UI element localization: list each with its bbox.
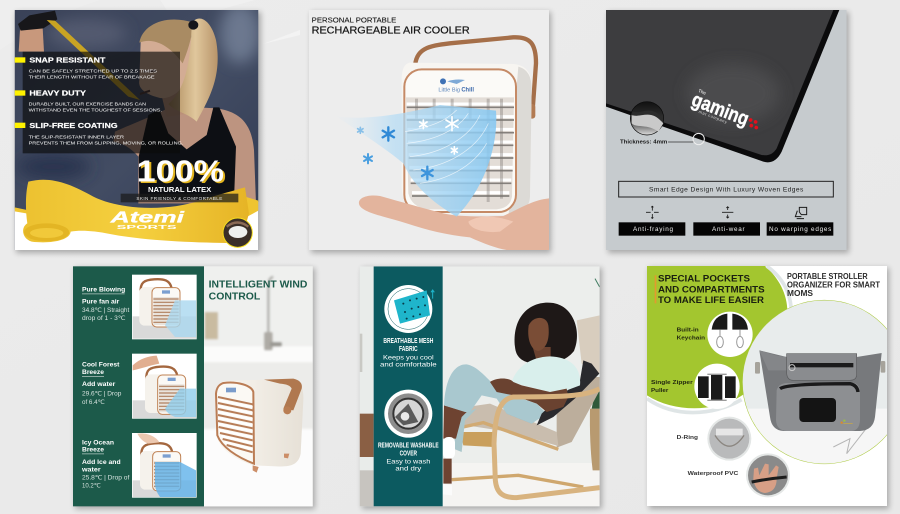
heading <box>209 280 307 303</box>
feature: removable washable cover: Easy to wash <box>386 459 431 466</box>
hand <box>359 196 549 250</box>
label: no warping edges: No warping edges <box>769 226 831 233</box>
panel: intelligent wind control <box>73 264 315 509</box>
yellow band <box>15 180 258 243</box>
heading: INTELLIGENT WIND <box>209 280 307 291</box>
headline: SPECIAL POCKETS <box>658 274 750 284</box>
title: MOMS <box>787 289 814 298</box>
mode 2: cool forest breeze <box>82 354 197 419</box>
headline: AND COMPARTMENTS <box>658 284 765 294</box>
logo on cooler: Chill <box>461 86 474 93</box>
icon: anti-wear <box>722 207 733 218</box>
feature: single zipper puller <box>651 364 740 409</box>
label: anti-wear <box>693 222 760 236</box>
feature list: SNAP RESISTANT <box>29 58 106 65</box>
black top <box>139 107 236 200</box>
feature: single zipper puller: Single Zipper <box>651 380 694 386</box>
headline: 100% natural latex: 100% <box>139 155 226 190</box>
feature: breathable mesh: and comfortable <box>380 361 437 368</box>
heading: RECHARGEABLE AIR COOLER <box>312 25 470 36</box>
feature: waterproof pvc: Waterproof PVC <box>688 471 738 477</box>
teal sidebar <box>374 266 443 506</box>
feature list <box>15 57 183 145</box>
feature list: CAN BE SAFELY STRETCHED UP TO 2.5 TIMES <box>29 69 157 74</box>
logo <box>110 210 185 229</box>
cooler body <box>402 63 532 215</box>
icons: snowflakes <box>358 117 458 179</box>
mode 3: icy ocean breeze: Icy Ocean <box>82 439 114 446</box>
banner: smart edge design <box>619 181 833 197</box>
feature list: HEAVY DUTY <box>29 91 86 98</box>
feature: built-in keychain: Built-in <box>677 327 699 333</box>
mode 3: icy ocean breeze <box>81 433 197 498</box>
feature list: SLIP-FREE COATING <box>29 123 118 130</box>
feature: removable washable cover: and dry <box>395 465 422 472</box>
mode 3: icy ocean breeze: Breeze <box>82 447 104 454</box>
feature: breathable mesh <box>380 285 437 368</box>
title: ORGANIZER FOR SMART <box>787 280 880 289</box>
panel: stroller organizer <box>647 266 900 506</box>
photo: athlete <box>18 11 256 203</box>
logo on cooler: Little Big <box>438 87 460 93</box>
mode 1: pure blowing: drop of 1 - 3℃ <box>82 315 125 322</box>
heading: PERSONAL PORTABLE <box>312 18 397 25</box>
text backdrop <box>23 52 180 153</box>
face <box>139 38 192 98</box>
logo: gaming <box>689 89 752 131</box>
feature list: WITHSTAND EVEN THE TOUGHEST OF SESSIONS. <box>29 107 162 112</box>
mode 2: cool forest breeze: Add water <box>82 381 116 388</box>
cold air stream <box>353 105 496 216</box>
panel: seat cushion <box>360 266 600 506</box>
product photo circle <box>740 300 900 465</box>
feature: breathable mesh: BREATHABLE MESH <box>383 338 433 345</box>
mode 2: cool forest breeze: Cool Forest <box>82 362 120 369</box>
cooler handle <box>415 37 536 110</box>
banner: smart edge design: Smart Edge Design With Luxury Woven Edges <box>649 186 804 193</box>
feature: built-in keychain: Keychain <box>677 336 706 342</box>
feature list: PREVENTS THEM FROM SLIPPING, MOVING, OR ROLLING. <box>29 140 183 145</box>
logo: SPORTS <box>117 225 177 231</box>
thickness callout <box>620 133 704 146</box>
green sidebar <box>73 266 204 506</box>
kitchen backdrop <box>202 264 315 509</box>
label: no warping edges <box>767 222 833 236</box>
heading: CONTROL <box>209 292 260 303</box>
feature: breathable mesh: Keeps you cool <box>383 355 434 362</box>
logo: The <box>697 88 707 96</box>
label: anti-wear: Anti-wear <box>712 226 745 233</box>
wall texture highlights <box>17 3 260 180</box>
mode 1: pure blowing: Pure fan air <box>82 299 120 306</box>
hair <box>139 20 193 63</box>
feature list: THE SLIP-RESISTANT INNER LAYER <box>29 135 125 140</box>
title: PORTABLE STROLLER <box>787 272 868 281</box>
green quarter circle <box>647 266 787 408</box>
feature: built-in keychain <box>677 312 753 357</box>
icon: latex badge <box>223 218 252 247</box>
icon: anti-fraying <box>646 206 659 219</box>
feature: removable washable cover <box>378 390 439 472</box>
logo: mat company <box>698 109 728 124</box>
mode 1: pure blowing <box>82 275 197 339</box>
title <box>787 272 880 298</box>
product: grey organizer bag <box>755 350 885 431</box>
product: cooler <box>215 379 303 473</box>
mode 3: icy ocean breeze: Add Ice and <box>82 459 121 466</box>
edge detail lens <box>630 102 664 135</box>
headline: TO MAKE LIFE EASIER <box>658 295 764 305</box>
feature list: THEIR LENGTH WITHOUT FEAR OF BREAKAGE <box>29 74 155 79</box>
feature: breathable mesh: FABRIC <box>399 346 418 353</box>
mode 2: cool forest breeze: of 6.4℃ <box>82 399 105 406</box>
mode 1: pure blowing: 34.8℃ | Straight <box>82 307 130 314</box>
mat <box>606 10 839 162</box>
headline: 100% natural latex: NATURAL LATEX <box>148 185 212 194</box>
panel: gaming mouse mat <box>606 10 847 250</box>
thickness callout: Thickness: 4mm <box>620 140 668 146</box>
feature: single zipper puller: Puller <box>651 388 669 394</box>
headline: 100% natural latex <box>120 160 238 202</box>
mode 3: icy ocean breeze: 10.2℃ <box>82 483 101 490</box>
headline <box>655 274 765 305</box>
logo: Atemi <box>109 210 185 227</box>
feature: d-ring: D-Ring <box>677 435 699 441</box>
feature list: DURABLY BUILT, OUR EXERCISE BANDS CAN <box>29 102 146 107</box>
body <box>113 106 256 203</box>
mode 3: icy ocean breeze: water <box>81 467 101 474</box>
feature: d-ring <box>677 417 751 461</box>
label: anti-fraying <box>619 222 685 236</box>
feature: removable washable cover: REMOVABLE WASHABLE <box>378 443 439 450</box>
room photo <box>360 266 600 506</box>
mode 2: cool forest breeze: Breeze <box>82 369 104 376</box>
headline: 100% natural latex: 100% <box>137 154 224 189</box>
mode 1: pure blowing: Pure Blowing <box>82 286 125 293</box>
mode 3: icy ocean breeze: 25.8℃ | Drop of <box>82 474 130 481</box>
chair <box>452 315 600 487</box>
panel: resistance band <box>15 3 260 250</box>
woman <box>443 303 599 495</box>
mode 2: cool forest breeze: 29.6℃ | Drop <box>82 391 122 398</box>
white base <box>15 202 258 250</box>
feature: removable washable cover: COVER <box>400 451 417 458</box>
heading <box>312 18 470 34</box>
chair arm frame <box>494 389 600 498</box>
headline: 100% natural latex: SKIN FRIENDLY & COMFORTABLE <box>136 196 222 201</box>
feature: waterproof pvc <box>688 453 790 497</box>
panel: portable air cooler <box>309 10 549 250</box>
icon: no warping <box>795 207 807 219</box>
logo on cooler <box>438 78 474 93</box>
label: anti-fraying: Anti-fraying <box>633 226 673 233</box>
